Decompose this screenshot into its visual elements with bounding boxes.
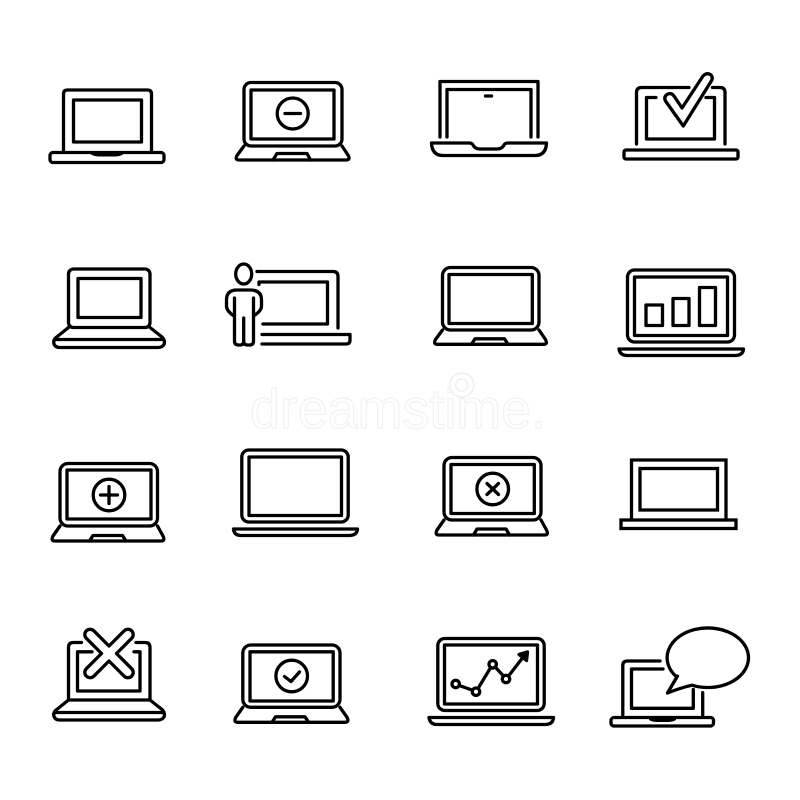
lid xyxy=(623,661,703,715)
screen xyxy=(444,645,538,704)
screen xyxy=(78,652,140,691)
person head xyxy=(236,264,252,284)
speech bubble xyxy=(667,628,748,693)
icon: laptop with line chart xyxy=(429,638,554,724)
lid xyxy=(444,458,541,520)
lid xyxy=(244,82,342,146)
screen xyxy=(250,652,333,701)
lid xyxy=(64,90,152,151)
icon: laptop with check mark xyxy=(624,74,738,159)
base xyxy=(611,718,714,726)
icon: laptop with trackpad xyxy=(435,268,546,344)
lid outer xyxy=(440,82,538,137)
base xyxy=(432,143,546,156)
screen xyxy=(646,98,714,139)
lid xyxy=(68,269,150,328)
lid xyxy=(60,464,158,526)
cross badge xyxy=(477,473,509,505)
lid xyxy=(636,88,725,144)
screen xyxy=(251,90,334,139)
base xyxy=(54,328,164,348)
lip notch xyxy=(650,720,675,721)
lid xyxy=(242,450,348,522)
lid xyxy=(628,270,734,342)
check mark xyxy=(665,74,712,126)
trackpad xyxy=(474,529,510,535)
large X xyxy=(85,629,133,678)
base xyxy=(619,349,744,356)
watermark: dreamstime. xyxy=(250,377,546,440)
screen xyxy=(74,100,142,142)
minus badge xyxy=(277,98,308,129)
icon: laptop with camera dash and curved base xyxy=(432,82,546,156)
trackpad xyxy=(472,339,508,344)
screen xyxy=(249,457,342,516)
lid xyxy=(438,638,544,710)
icon: person presenting at laptop xyxy=(226,264,350,345)
base xyxy=(435,330,546,344)
lid xyxy=(442,268,539,330)
icon: laptop with large X xyxy=(54,629,164,720)
screen xyxy=(640,468,718,510)
screen xyxy=(632,669,693,708)
base xyxy=(429,718,554,724)
trackpad xyxy=(90,536,126,541)
person body xyxy=(226,290,262,345)
lid xyxy=(243,645,340,707)
screen xyxy=(67,470,151,519)
base xyxy=(621,520,736,528)
base xyxy=(52,526,164,541)
base xyxy=(235,707,348,722)
icon: laptop with bar chart xyxy=(619,270,744,356)
base xyxy=(234,529,358,536)
lid xyxy=(632,460,726,520)
icon: laptop with speech bubble xyxy=(611,628,748,726)
lid xyxy=(257,272,338,328)
icon: square laptop xyxy=(621,460,736,528)
icon: laptop plain with lip notch xyxy=(50,90,164,162)
screen xyxy=(451,464,534,514)
screen xyxy=(78,278,141,318)
base xyxy=(236,146,349,160)
lip notch xyxy=(92,154,122,156)
icon: wide laptop with slim base xyxy=(234,450,358,536)
base xyxy=(262,334,350,344)
icon: laptop with minus xyxy=(236,82,349,160)
screen xyxy=(449,274,532,324)
camera xyxy=(486,94,492,98)
check badge xyxy=(276,660,308,692)
screen xyxy=(259,282,328,324)
base xyxy=(624,150,738,159)
base xyxy=(50,152,164,162)
trackpad xyxy=(273,154,310,160)
base xyxy=(54,700,164,720)
icon: laptop with cross xyxy=(436,458,547,535)
lid xyxy=(68,642,150,700)
trackpad xyxy=(272,717,308,722)
plus badge xyxy=(93,479,125,511)
line chart xyxy=(452,652,528,695)
bar chart xyxy=(646,288,716,326)
base xyxy=(436,520,547,535)
icon: laptop with check badge xyxy=(235,645,348,722)
screen xyxy=(634,277,728,336)
icon: laptop with double line base xyxy=(54,269,164,348)
icon: laptop with plus xyxy=(52,464,164,541)
lid inner xyxy=(447,90,531,137)
